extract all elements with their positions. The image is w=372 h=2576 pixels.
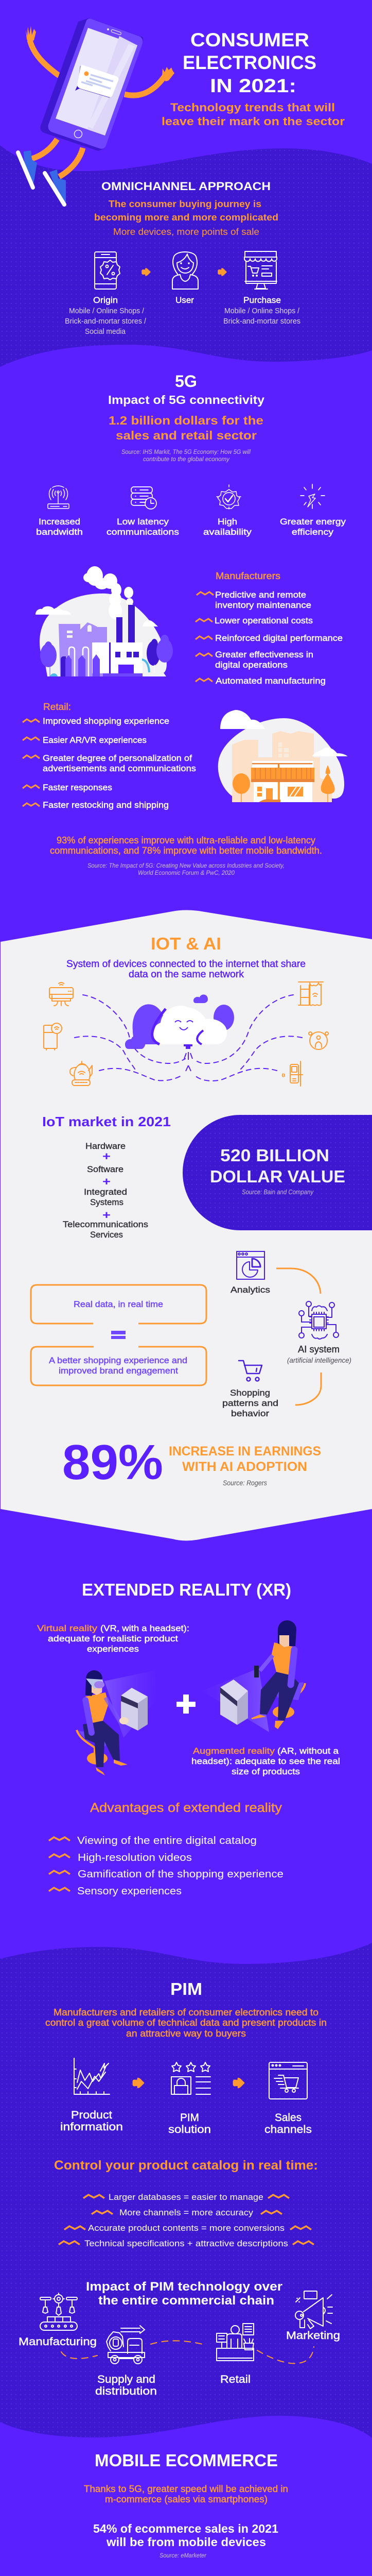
stat: 89 percent: 89%: [62, 1435, 163, 1490]
panel: 520 billion: 520 BILLION: [220, 1146, 329, 1165]
icon: PIM solution: [171, 2062, 210, 2094]
box: better shopping: improved brand engagement: [59, 1366, 178, 1376]
PIM intro: Manufacturers and retailers of consumer electronics need to: [54, 2007, 318, 2018]
illustration: woman with VR headset: [77, 1670, 156, 1775]
wave band: omnichannel background: [0, 145, 372, 367]
source note: [121, 448, 251, 463]
list: IoT market components: Telecommunications: [63, 1219, 148, 1229]
icon: manufacturing: [40, 2293, 77, 2330]
text: augmented reality: headset): adequate to see the real: [191, 1756, 340, 1766]
dashed link: manufacturing to supply: [61, 2352, 97, 2359]
stat: 1.2 billion: 1.2 billion dollars for the: [109, 414, 263, 427]
list: XR advantages: Sensory experiences: [77, 1886, 182, 1897]
omnichannel intro: becoming more and more complicated: [94, 212, 278, 223]
step: origin: Social media: [85, 327, 126, 336]
list: retail benefits: [23, 716, 196, 810]
illustration: factory: [36, 566, 173, 676]
IoT description: System of devices connected to the internet that share: [66, 959, 306, 970]
label: shopping patterns: behavior: [231, 1409, 269, 1418]
network dashed connectors: [75, 995, 302, 1081]
step: purchase: Purchase: [243, 295, 281, 305]
title: IN 2021:: [210, 75, 296, 96]
omnichannel intro: [94, 199, 278, 237]
panel: 520 billion: DOLLAR VALUE: [210, 1167, 345, 1186]
box: real data: Real data, in real time: [74, 1299, 163, 1309]
label: marketing: Marketing: [286, 2330, 340, 2342]
arrow: AI to shopping: [295, 1372, 321, 1405]
labels: PIM flow: channels: [264, 2124, 312, 2136]
step: purchase: Brick-and-mortar stores: [223, 317, 300, 326]
text: augmented reality: size of products: [232, 1767, 300, 1776]
stat caption: INCREASE IN EARNINGS: [169, 1444, 321, 1459]
label: AI system: (artificial intelligence): [287, 1356, 351, 1364]
benefit labels: High: [218, 517, 237, 527]
benefit labels: communications: [107, 527, 179, 537]
text: m-commerce intro: [84, 2484, 288, 2504]
arrow: [133, 2078, 144, 2088]
icon: router: [48, 486, 69, 509]
list: XR advantages: High-resolution videos: [78, 1852, 192, 1863]
labels: PIM flow: information: [60, 2121, 123, 2133]
labels: PIM flow: Sales: [275, 2112, 302, 2124]
labels: supply and retail: distribution: [95, 2385, 157, 2397]
list: manufacturers benefits: Predictive and remote: [215, 590, 306, 600]
icon: energy bolt: [300, 484, 325, 509]
benefit labels: Greater energy: [280, 517, 346, 527]
panel: light IoT and AI background: [1, 910, 372, 1540]
label: shopping patterns: [222, 1388, 278, 1418]
icon: smart fridge: [44, 1023, 62, 1050]
label: analytics: Analytics: [231, 1285, 270, 1295]
heading: advantages: Advantages of extended reality: [90, 1801, 282, 1815]
list: retail benefits: Improved shopping experience: [43, 716, 169, 726]
title: CONSUMER: [190, 29, 309, 50]
stat caption: [169, 1444, 321, 1487]
text: m-commerce intro: m-commerce (sales via smartphones): [105, 2494, 268, 2504]
step: origin: Origin: [93, 295, 118, 305]
icon: AI chip: [299, 1301, 339, 1339]
icon: mobile offer: [95, 252, 120, 289]
heading: mobile ecommerce: MOBILE ECOMMERCE: [95, 2451, 278, 2470]
heading: control catalog: Control your product catalog in real time:: [54, 2158, 318, 2173]
PIM intro: control a great volume of technical data and present products in: [45, 2018, 327, 2028]
callout: 93 percent: [50, 835, 322, 856]
list: XR advantages: Gamification of the shopping experience: [78, 1869, 284, 1880]
stat caption: WITH AI ADOPTION: [182, 1460, 307, 1474]
icon: smart lock: [282, 1061, 303, 1086]
text: augmented reality: (AR, without a: [277, 1746, 339, 1756]
equals sign: [111, 1331, 126, 1339]
callout: 93 percent: 93% of experiences improve with ultra-reliable and low-latency: [57, 835, 315, 845]
list: catalog benefits: [59, 2192, 314, 2248]
icon: marketing megaphone: [295, 2291, 332, 2329]
heading: impact of PIM: Impact of PIM technology over: [86, 2280, 282, 2294]
step: origin: Mobile / Online Shops /: [69, 307, 145, 315]
icon: robot vacuum: [309, 1032, 328, 1049]
benefit labels: Increased: [39, 517, 80, 527]
list: manufacturers benefits: Lower operational costs: [215, 616, 313, 625]
list: retail benefits: Greater degree of personalization of: [43, 753, 192, 763]
heading: retail: Retail:: [43, 702, 71, 712]
subtitle: Technology trends that will: [170, 101, 335, 114]
labels: PIM flow: solution: [168, 2124, 211, 2136]
icon: product information chart: [74, 2058, 110, 2094]
title: [183, 29, 316, 96]
IoT description: [66, 959, 306, 980]
icon: smart curtain: [298, 982, 323, 1006]
heading: omnichannel approach: OMNICHANNEL APPROACH: [101, 180, 271, 193]
text: augmented reality: Augmented reality: [193, 1746, 275, 1756]
text: virtual reality: Virtual reality: [37, 1623, 98, 1633]
stat: 54 percent: will be from mobile devices: [106, 2535, 266, 2549]
list: catalog benefits: Accurate product contents = more conversions: [88, 2223, 285, 2233]
source note: Source: IHS Markit, The 5G Economy: How 5G will: [121, 448, 251, 455]
list: retail benefits: Faster responses: [43, 783, 112, 792]
icon: online store: [244, 251, 277, 289]
stat: 1.2 billion: [109, 414, 263, 442]
box: real data: [31, 1285, 206, 1324]
labels: supply and retail: Supply and: [97, 2374, 155, 2385]
heading: PIM: PIM: [170, 1979, 202, 1998]
arrow: [234, 2078, 244, 2088]
panel: 520 billion: Source: Bain and Company: [242, 1188, 314, 1196]
list: manufacturers benefits: Greater effectiveness in: [215, 650, 313, 659]
labels: supply and retail: [95, 2374, 251, 2397]
illustration: running phone character: [18, 18, 174, 205]
box: better shopping: [31, 1347, 206, 1385]
plus sign: [176, 1694, 196, 1714]
text: virtual reality: experiences: [87, 1644, 139, 1654]
heading: IoT market: IoT market in 2021: [42, 1114, 171, 1129]
illustration: retail shop: [218, 710, 348, 802]
benefit labels: [36, 517, 346, 537]
panel: 520 billion: [183, 1115, 372, 1230]
IoT description: data on the same network: [129, 969, 244, 980]
list: IoT market components: Hardware: [85, 1141, 126, 1151]
icon: user: [172, 252, 198, 289]
list: retail benefits: advertisements and communications: [43, 764, 196, 773]
source note: [87, 862, 285, 876]
benefit labels: availability: [203, 527, 252, 537]
icon: high availability gear: [217, 485, 241, 509]
list: XR advantages: Viewing of the entire digital catalog: [77, 1835, 257, 1846]
icon: supply and distribution: [107, 2326, 145, 2364]
icon: air conditioner: [49, 982, 73, 1006]
label: manufacturing: Manufacturing: [19, 2336, 97, 2348]
text: augmented reality: [191, 1746, 340, 1776]
icon: cart: [239, 1361, 262, 1381]
stat: 1.2 billion: sales and retail sector: [116, 429, 257, 442]
PIM intro: [45, 2007, 327, 2039]
list: manufacturers benefits: inventory maintenance: [215, 600, 311, 610]
label: shopping patterns: Shopping: [230, 1388, 270, 1398]
list: IoT market components: +: [102, 1209, 111, 1222]
icon: retail checkout: [217, 2324, 254, 2361]
list: IoT market components: +: [102, 1150, 111, 1163]
text: virtual reality: adequate for realistic product: [48, 1634, 178, 1643]
heading: manufacturers: Manufacturers: [216, 571, 280, 581]
omnichannel intro: More devices, more points of sale: [113, 227, 259, 237]
arrow: [142, 268, 150, 276]
list: manufacturers benefits: Automated manufacturing: [216, 676, 326, 686]
stat: 54 percent: 54% of ecommerce sales in 2021: [93, 2522, 278, 2535]
list: IoT market components: [63, 1141, 148, 1240]
step: origin: Brick-and-mortar stores /: [65, 317, 147, 326]
icon: analytics: [237, 1251, 264, 1279]
step: origin: [65, 295, 147, 336]
list: catalog benefits: More channels = more accuracy: [119, 2208, 254, 2217]
labels: PIM flow: [60, 2109, 312, 2136]
stat: 54 percent: [93, 2522, 278, 2549]
heading: extended reality: EXTENDED REALITY (XR): [82, 1580, 291, 1599]
icon: sales channels: [269, 2062, 307, 2099]
labels: PIM flow: Product: [71, 2109, 112, 2121]
illustration: happy cloud: [125, 994, 234, 1071]
list: manufacturers benefits: Reinforced digital performance: [215, 633, 343, 643]
step: purchase: Mobile / Online Shops /: [224, 307, 300, 315]
icon: low latency server: [131, 487, 156, 509]
title: ELECTRONICS: [183, 52, 316, 73]
list: catalog benefits: Technical specifications + attractive descriptions: [84, 2239, 288, 2248]
illustration: woman with AR phone: [202, 1620, 305, 1732]
wave band: PIM background: [0, 1943, 372, 2438]
list: catalog benefits: Larger databases = easier to manage: [109, 2192, 263, 2202]
subtitle: [162, 101, 345, 128]
benefit labels: bandwidth: [36, 527, 83, 537]
dashed link: retail to marketing: [257, 2347, 314, 2364]
box: better shopping: A better shopping experience and: [49, 1355, 187, 1365]
arrow: analytics to AI: [276, 1268, 321, 1294]
heading: 5G: 5G: [175, 372, 197, 391]
benefit labels: Low latency: [117, 517, 169, 527]
heading: impact of PIM: the entire commercial chain: [98, 2294, 274, 2308]
omnichannel intro: The consumer buying journey is: [109, 199, 261, 209]
heading: IoT and AI: IOT & AI: [151, 934, 221, 953]
text: virtual reality: [37, 1623, 189, 1654]
source note: Source: The Impact of 5G: Creating New Value across Industries and Society,: [87, 862, 285, 869]
source note: World Economic Forum & PwC, 2020: [138, 869, 235, 876]
list: manufacturers benefits: digital operations: [215, 660, 288, 670]
text: m-commerce intro: Thanks to 5G, greater speed will be achieved in: [84, 2484, 288, 2494]
list: IoT market components: Systems: [90, 1197, 123, 1207]
stat caption: Source: Rogers: [223, 1479, 267, 1487]
label: AI system: AI system: [298, 1344, 340, 1354]
heading: impact of PIM: [86, 2280, 282, 2308]
list: retail benefits: Faster restocking and shipping: [43, 800, 169, 810]
labels: PIM flow: PIM: [180, 2112, 199, 2124]
PIM intro: an attractive way to buyers: [126, 2028, 246, 2039]
source note: contribute to the global economy: [143, 455, 230, 463]
step: user: User: [175, 295, 194, 305]
step: purchase: [223, 295, 300, 326]
subtitle: leave their mark on the sector: [162, 115, 345, 128]
callout: 93 percent: communications, and 78% improve with better mobile bandwidth.: [50, 845, 322, 856]
source note: Source: eMarketer: [160, 2552, 207, 2559]
list: IoT market components: +: [102, 1175, 111, 1188]
label: AI system: [287, 1344, 351, 1364]
subheading: impact of 5G: Impact of 5G connectivity: [108, 393, 264, 406]
icon: smart kettle: [70, 1061, 92, 1086]
list: IoT market components: Services: [90, 1230, 123, 1240]
list: IoT market components: Software: [87, 1164, 123, 1174]
labels: supply and retail: Retail: [220, 2374, 251, 2385]
text: virtual reality: (VR, with a headset):: [100, 1623, 189, 1633]
arrow: [218, 268, 226, 276]
list: XR advantages: [49, 1835, 284, 1897]
list: IoT market components: Integrated: [84, 1187, 127, 1197]
dashed link: supply to retail: [151, 2341, 206, 2345]
label: shopping patterns: patterns and: [222, 1398, 278, 1408]
list: manufacturers benefits: [196, 590, 343, 686]
list: retail benefits: Easier AR/VR experiences: [43, 735, 147, 745]
benefit labels: efficiency: [292, 527, 334, 537]
